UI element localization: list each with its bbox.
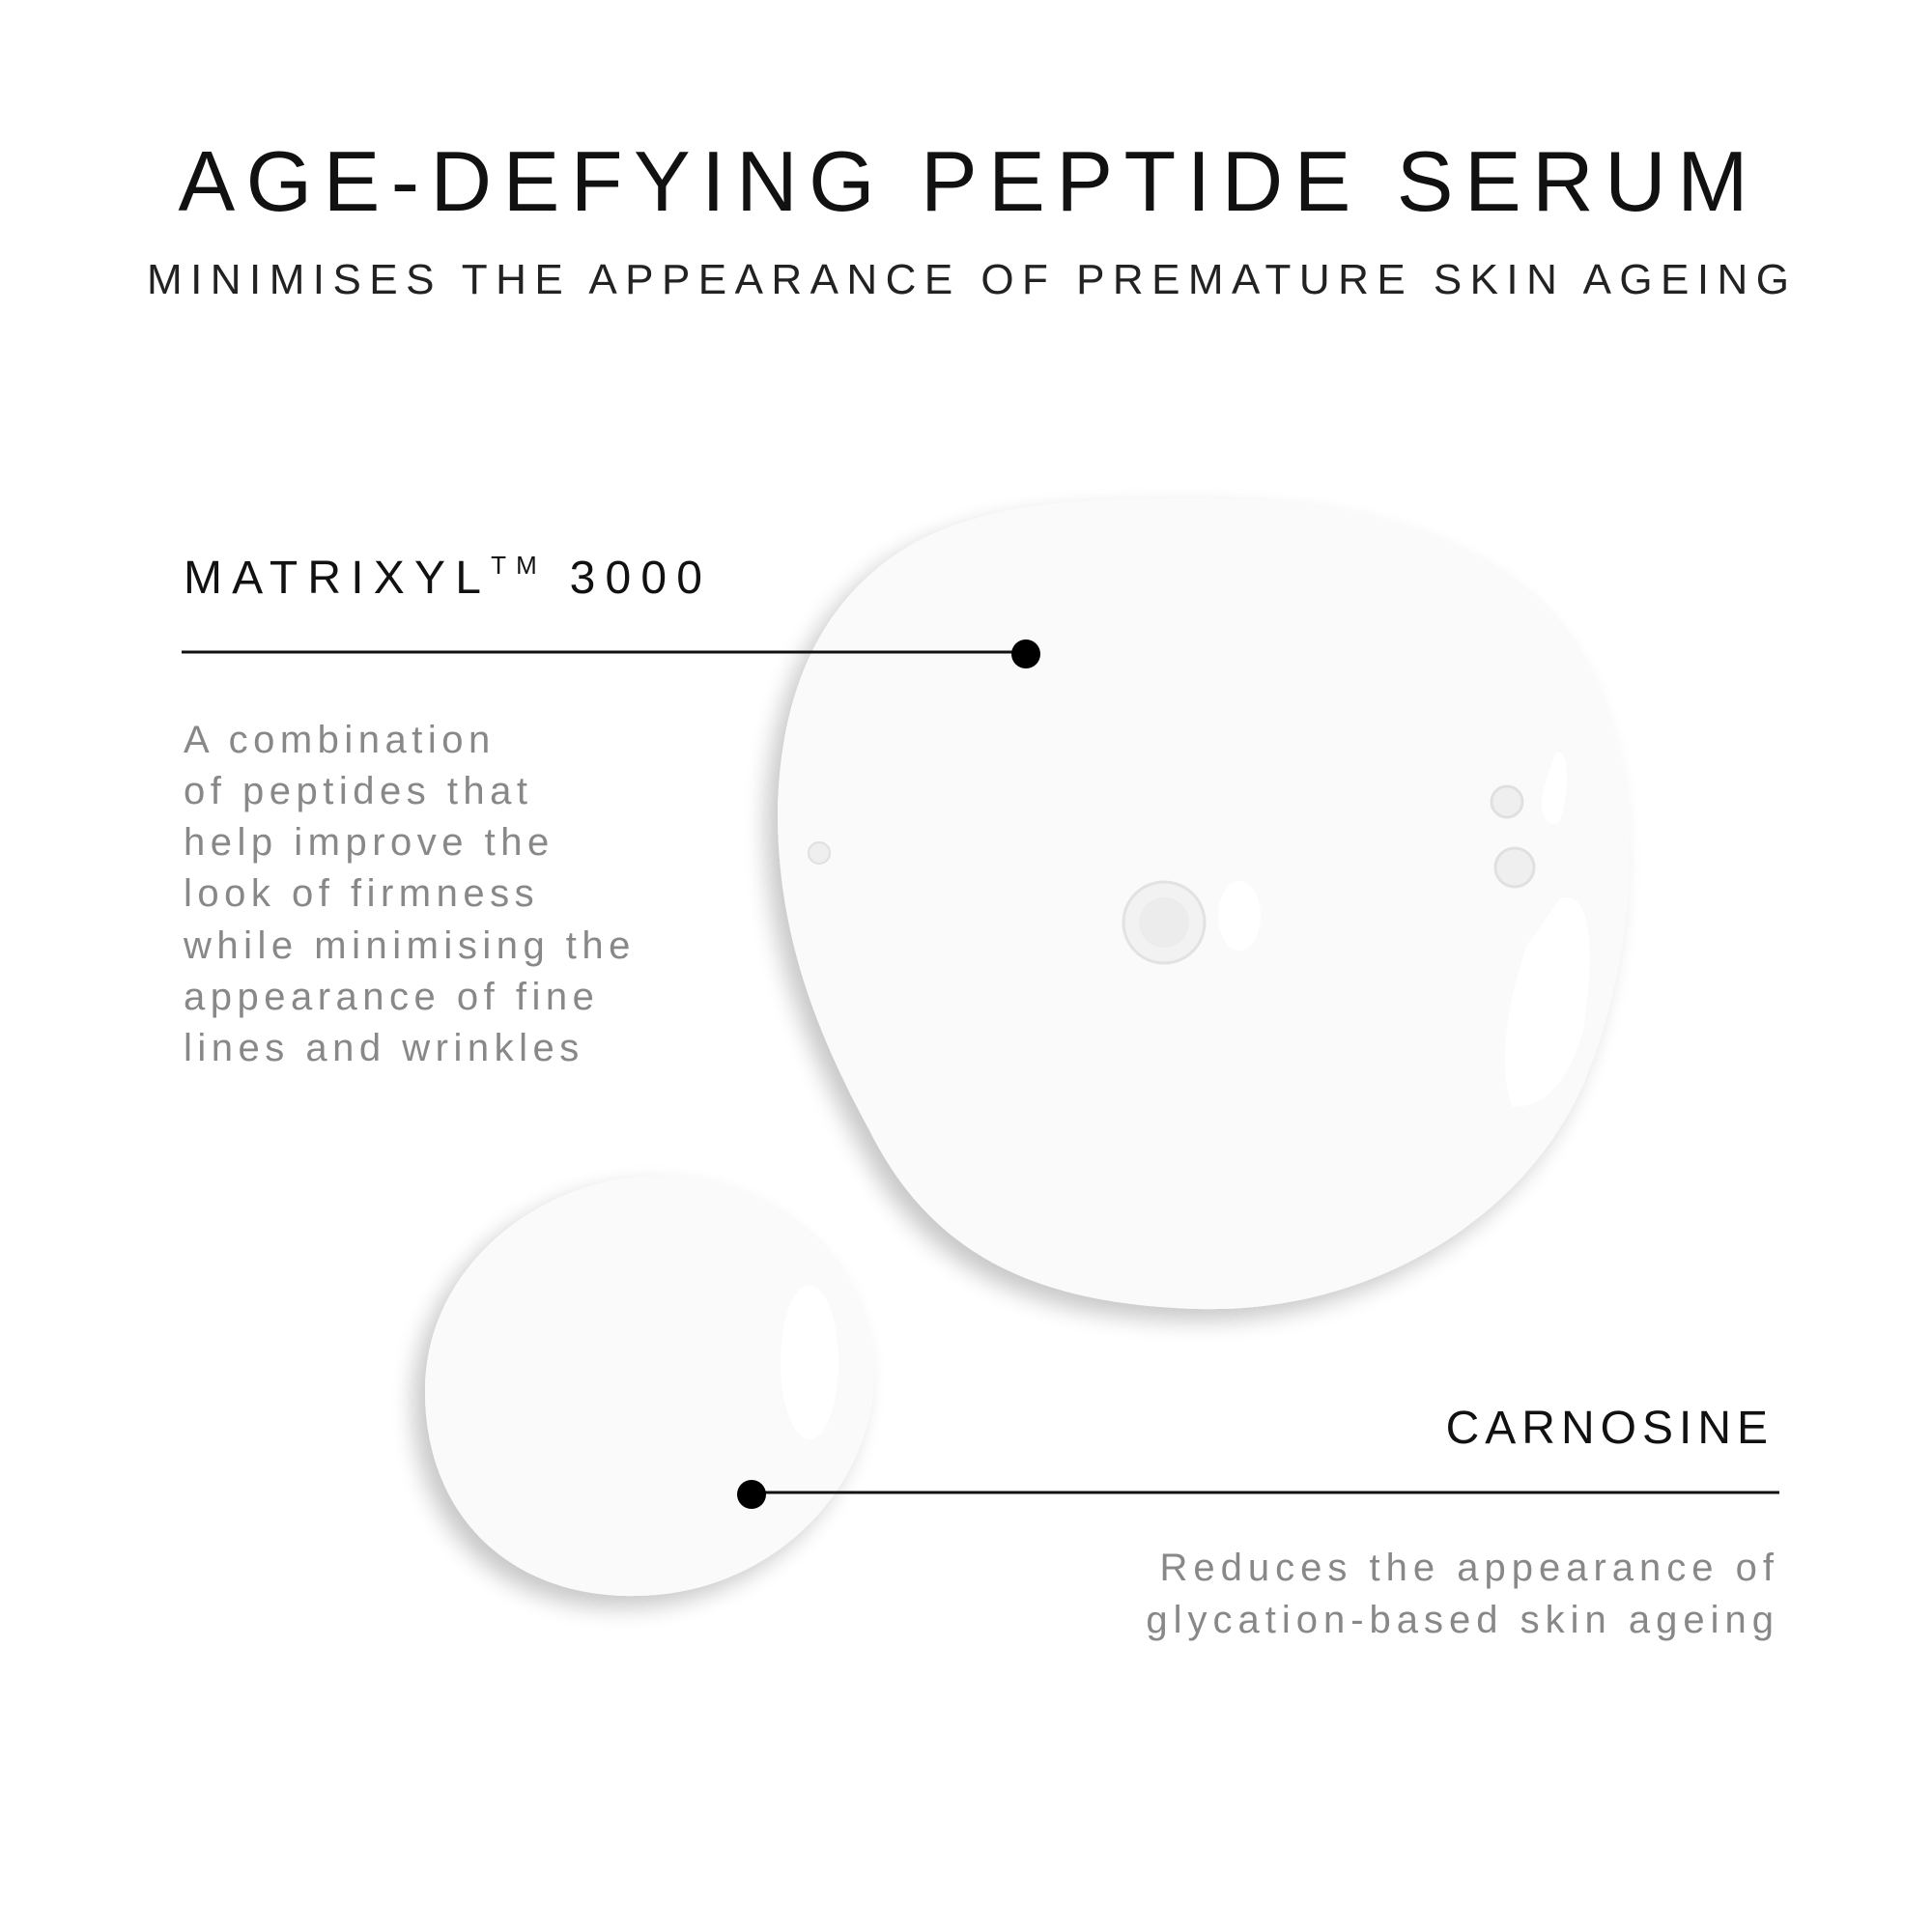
label: matrixyl: TM xyxy=(491,551,537,580)
text: carnosine description xyxy=(1146,1547,1779,1641)
drop bubbles and highlights xyxy=(809,753,1590,1106)
text: carnosine description: Reduces the appearance of xyxy=(1160,1547,1779,1589)
text: matrixyl description: A combination xyxy=(184,719,496,761)
text: matrixyl description: lines and wrinkles xyxy=(184,1027,584,1069)
text: matrixyl description: of peptides that xyxy=(184,770,533,812)
text: matrixyl description: appearance of fine xyxy=(184,976,599,1018)
text: carnosine description: glycation-based skin ageing xyxy=(1146,1599,1779,1641)
label: carnosine: CARNOSINE xyxy=(1446,1403,1774,1454)
subtitle: MINIMISES THE APPEARANCE OF PREMATURE SKIN AGEING xyxy=(147,256,1789,303)
connector: carnosine xyxy=(737,1480,1779,1509)
text: matrixyl description: look of firmness xyxy=(184,872,539,915)
label: matrixyl: MATRIXYL xyxy=(184,553,481,604)
text: matrixyl description: help improve the xyxy=(184,821,554,864)
large serum drop xyxy=(778,498,1630,1309)
small serum drop xyxy=(425,1176,874,1596)
connector: matrixyl xyxy=(182,639,1040,668)
text: matrixyl description: while minimising the xyxy=(183,924,636,967)
small drop highlight xyxy=(781,1285,838,1439)
label: matrixyl: 3000 xyxy=(547,553,702,604)
title: AGE-DEFYING PEPTIDE SERUM xyxy=(178,133,1748,229)
text: matrixyl description xyxy=(183,719,636,1069)
